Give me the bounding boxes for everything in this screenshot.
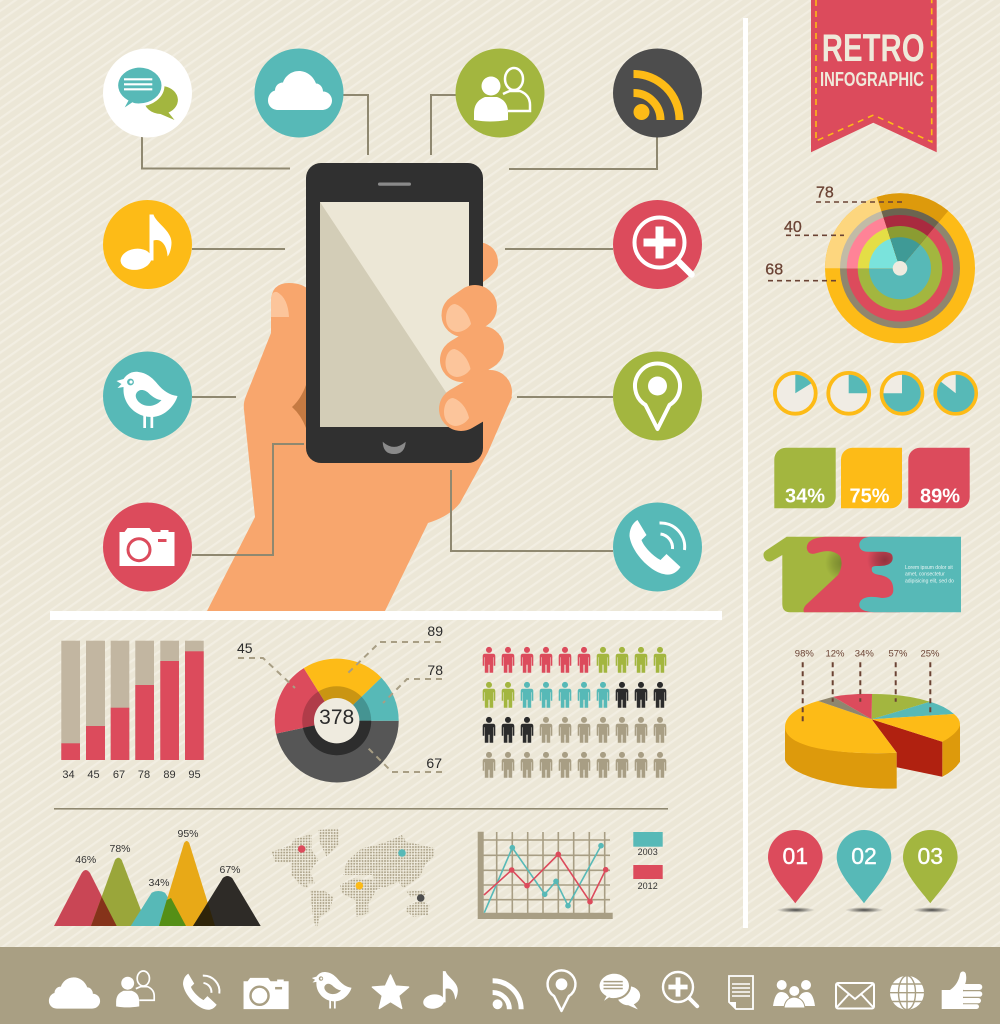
stacked bar chart: 89 [163, 769, 176, 781]
bar icon: phone [183, 974, 219, 1010]
icon: users [456, 48, 544, 138]
radial chart: 40 [784, 219, 802, 236]
people pictogram grid [483, 647, 666, 778]
bottom icon bar [0, 947, 1000, 1024]
donut chart: 378 [319, 706, 354, 729]
icon: music note [103, 200, 192, 289]
donut chart: 67 [426, 755, 442, 771]
horizontal white divider [50, 611, 722, 620]
icon: camera [103, 502, 192, 592]
3D pie chart: 98% [795, 649, 814, 660]
hand back finger [480, 243, 498, 282]
bar icon: magnifier [663, 972, 697, 1006]
stacked bar chart: 34 [62, 769, 75, 781]
radial chart: 78 [816, 184, 834, 201]
smartphone [306, 163, 483, 463]
icon: phone [613, 502, 702, 592]
icon: magnifier [613, 200, 702, 289]
123 numbered banner [763, 537, 961, 612]
stacked bar chart: 95 [188, 769, 201, 781]
line chart legend: 2012 [638, 881, 658, 891]
stacked bar chart: 67 [113, 769, 125, 781]
palm crease [292, 385, 306, 428]
icon: cloud [254, 48, 344, 138]
bar icon: document [729, 976, 753, 1009]
percent card 89 [908, 448, 970, 508]
map pin 02 [837, 830, 891, 913]
bar icon: bird [312, 972, 352, 1008]
icon: bird [103, 352, 192, 440]
line chart legend [633, 832, 663, 891]
percent card 75 [841, 448, 902, 508]
ribbon title: INFOGRAPHIC [820, 69, 924, 91]
bar icon: envelope [836, 983, 874, 1008]
bar icon: group [773, 980, 815, 1008]
percent card 75: 75% [849, 485, 890, 507]
bar icon: star [372, 975, 409, 1008]
bar icon: camera [244, 978, 289, 1009]
line chart legend: 2003 [638, 847, 658, 857]
mountain chart: 34% [148, 877, 170, 889]
ribbon title: RETRO [822, 27, 925, 70]
123 numbered banner: Lorem ipsum dolor sit [905, 565, 953, 571]
map pin 01: 01 [783, 843, 808, 869]
ribbon title [811, 0, 937, 152]
map pin 03: 03 [918, 843, 943, 869]
bar icon: speech bubbles [599, 973, 640, 1009]
bar icon: globe [890, 976, 924, 1010]
map pin 03 [903, 830, 958, 913]
thumb nail [271, 292, 289, 317]
percent card 89: 89% [920, 485, 960, 507]
percent card 34: 34% [785, 485, 825, 507]
3D pie chart: 57% [888, 649, 908, 660]
mountain chart: 67% [219, 864, 241, 876]
3D pie chart: 12% [825, 649, 845, 660]
bar icon: thumbs up [942, 971, 982, 1009]
line chart [478, 832, 613, 919]
fingers [444, 304, 490, 426]
icon: rss [613, 48, 702, 138]
radial chart: 68 [765, 261, 783, 278]
map pin 02: 02 [851, 843, 877, 869]
radial chart [765, 184, 975, 343]
123 numbered banner: adipisicing elit, sed do [905, 578, 954, 584]
123 numbered banner: amet, consectetur [905, 572, 945, 578]
icon: speech bubbles [103, 48, 192, 138]
bar icon: music note [422, 971, 458, 1010]
bar icon: rss [493, 981, 521, 1009]
icon: map pin [613, 352, 702, 440]
hand [207, 283, 512, 611]
donut chart: 78 [427, 662, 443, 678]
stacked bar chart [61, 641, 204, 781]
vertical divider [743, 18, 748, 928]
3D pie chart: 25% [920, 649, 940, 660]
3D pie chart: 34% [855, 649, 874, 660]
dotted world map [272, 828, 435, 928]
bar icon: map pin [548, 970, 575, 1011]
map pin 01 [768, 830, 823, 913]
donut chart: 45 [237, 640, 253, 656]
small progress pies [775, 373, 976, 414]
3D pie chart [785, 649, 960, 789]
mountain chart [54, 828, 261, 926]
stacked bar chart: 78 [138, 769, 150, 781]
bar icon: users [116, 971, 154, 1007]
mountain chart: 95% [177, 828, 199, 840]
donut chart [237, 623, 443, 783]
mountain chart: 78% [109, 843, 131, 855]
connector lines [142, 95, 657, 555]
mountain chart: 46% [75, 854, 96, 866]
bar icon: cloud [49, 977, 100, 1009]
stacked bar chart: 45 [87, 769, 100, 781]
donut chart: 89 [427, 623, 443, 639]
percent card 34 [774, 448, 836, 508]
